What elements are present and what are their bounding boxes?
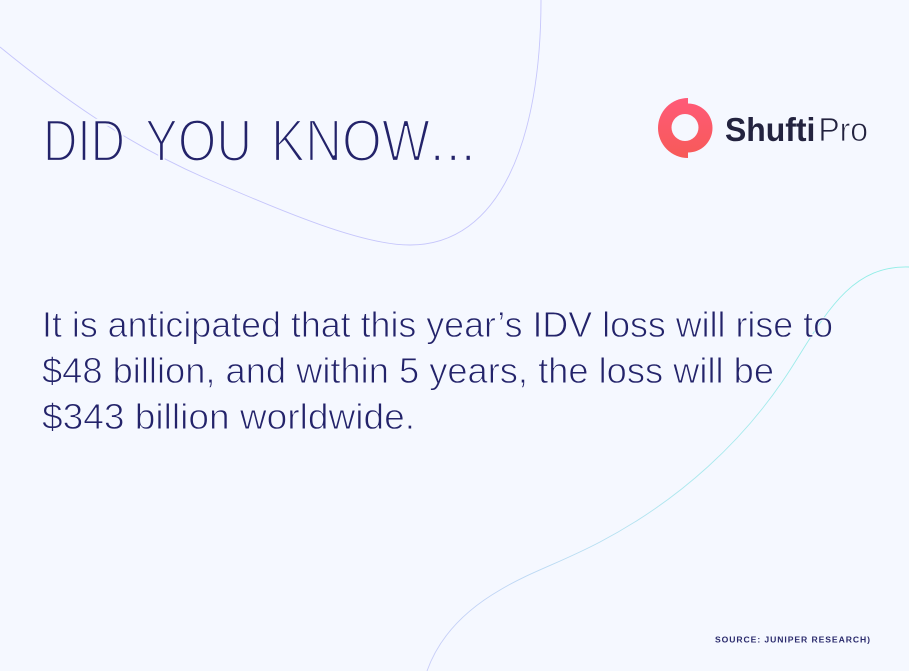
source note: SOURCE: JUNIPER RESEARCH): [715, 634, 870, 644]
title: ...: [429, 108, 476, 174]
body line 2: $48 billion, and within 5 years, the loss will be: [42, 350, 774, 391]
curve: teal lower right: [427, 267, 909, 671]
icon: logo ring: [658, 98, 712, 158]
title: YOU: [145, 108, 252, 174]
title: DID: [43, 108, 125, 174]
body line 3: $343 billion worldwide.: [42, 396, 415, 437]
title: [43, 108, 476, 174]
logo: [658, 98, 868, 158]
body text: [42, 304, 833, 437]
logo wordmark: ShuftiPro: [725, 111, 868, 148]
title: KNOW: [271, 108, 430, 174]
curve: lavender top: [0, 0, 541, 245]
body line 1: It is anticipated that this year’s IDV loss will rise to: [42, 304, 833, 345]
